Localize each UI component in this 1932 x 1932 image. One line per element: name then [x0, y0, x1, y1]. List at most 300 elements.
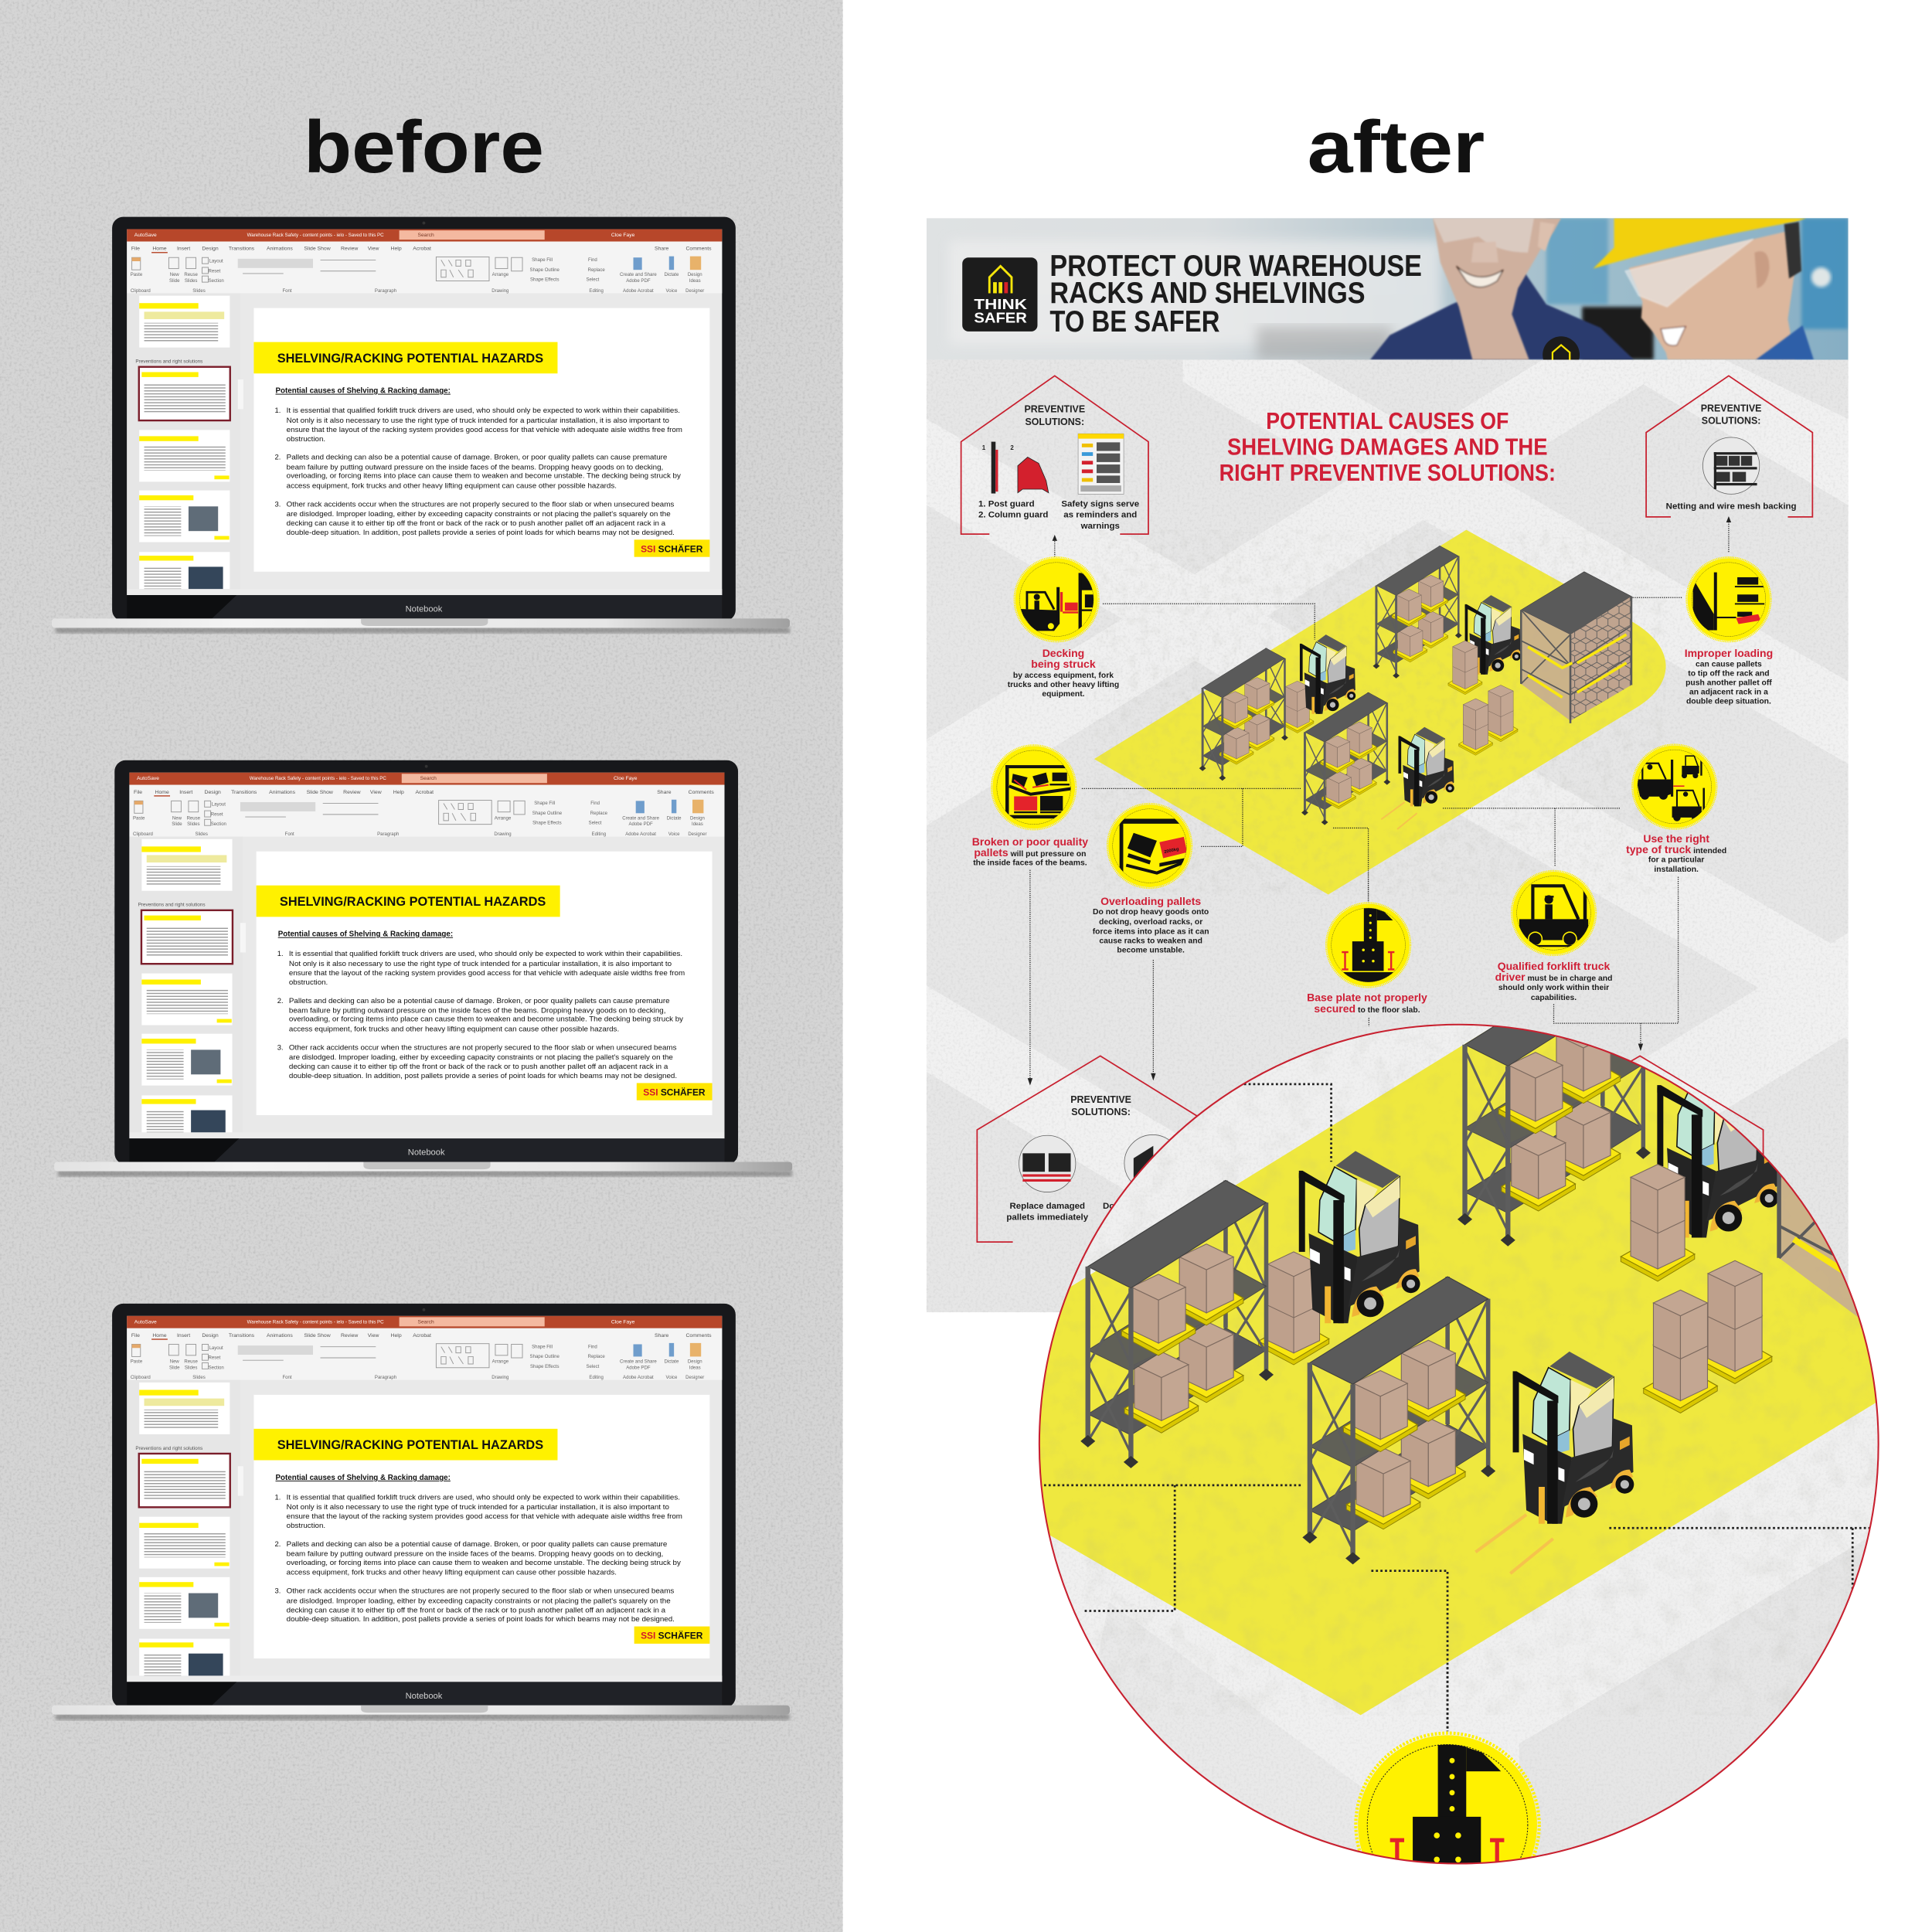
icon: replace damaged pallets	[1019, 1135, 1076, 1192]
laptop 1: slide on shelving hazards: Design	[202, 247, 219, 252]
laptop 1: slide on shelving hazards: access equipment, fork trucks and other heavy lifting equipment can cause other possible hazards.	[287, 481, 617, 489]
laptop 2: slide on shelving hazards: overloading, or forcing items into place can cause them to weaken and become unstable. The decking being struck by	[289, 1015, 683, 1023]
laptop 2: slide on shelving hazards: Insert	[179, 790, 192, 795]
panel: preventive solutions pallets: pallets immediately	[1006, 1213, 1089, 1222]
laptop 3: slide on shelving hazards: Shape Fill	[532, 1345, 553, 1349]
cause: broken pallets	[972, 745, 1088, 867]
laptop 1: slide on shelving hazards: Slides	[185, 279, 197, 284]
laptop 3: slide on shelving hazards: File	[131, 1333, 140, 1338]
heading: before: before	[304, 106, 544, 189]
laptop 3: slide on shelving hazards: ensure that the layout of the racking system provides good access for that vehicle with adequate aisle widths free from	[287, 1512, 682, 1520]
cause: overloading pallets	[1093, 804, 1209, 954]
laptop 1: slide on shelving hazards: SHELVING/RACKING POTENTIAL HAZARDS	[277, 351, 543, 366]
laptop 3: slide on shelving hazards: Pallets and decking can also be a potential cause of damage. Broken, or poor quality pallets can cause premature	[287, 1539, 667, 1548]
laptop 2: slide on shelving hazards: Find	[590, 801, 600, 806]
text: safety signs	[1061, 499, 1139, 531]
panel: preventive solutions netting: SOLUTIONS:	[1702, 415, 1760, 426]
icon: post guard	[982, 442, 1014, 494]
cause: overloading pallets: Do not drop heavy goods onto	[1093, 908, 1209, 917]
laptop 1: slide on shelving hazards: Shape Outline	[530, 268, 560, 273]
laptop 2: slide on shelving hazards: Warehouse Rack Safety - content points - ielo - Saved to this PC	[250, 776, 386, 781]
panel: preventive solutions netting: PREVENTIVE	[1701, 403, 1761, 414]
laptop 2: slide on shelving hazards: Clipboard	[133, 832, 153, 837]
icon: column guard	[1018, 457, 1049, 493]
icon: do not overload	[1124, 1134, 1181, 1192]
laptop 3: slide on shelving hazards: decking can cause it to either tip off the front or back of the rack or to push another pallet off an adjacent rack in a	[287, 1605, 666, 1614]
laptop 2: slide on shelving hazards: Reset	[211, 812, 223, 817]
laptop 3: slide on shelving hazards: obstruction.	[287, 1521, 325, 1529]
laptop 1: slide on shelving hazards: double-deep situation. In addition, post pallets provide a series of point loads for which beams may not be designed.	[287, 528, 675, 536]
laptop 1: slide on shelving hazards: Shape Fill	[532, 258, 553, 263]
laptop 1: slide on shelving hazards: Not only is it also necessary to use the right type of truck intended for a particular installation, it is also important to	[287, 416, 669, 424]
laptop 1: slide on shelving hazards: Drawing	[492, 289, 509, 294]
text: safety signs: as reminders and	[1063, 511, 1137, 520]
laptop 1: slide on shelving hazards: Animations	[267, 247, 293, 252]
laptop 2: slide on shelving hazards: Font	[285, 832, 294, 837]
panel: right preventive house fragment	[1602, 1056, 1764, 1202]
title: protect our warehouse: RACKS AND SHELVINGS	[1049, 277, 1366, 310]
icon: broken pallets on rack	[992, 745, 1076, 830]
laptop 3: slide on shelving hazards: Clipboard	[131, 1376, 151, 1380]
laptop 1: slide on shelving hazards: Adobe PDF	[626, 279, 651, 284]
laptop 2: slide on shelving hazards: Reuse	[187, 816, 201, 821]
laptop 2: slide on shelving hazards: Paste	[133, 816, 145, 821]
panel: preventive solutions pallets: SOLUTIONS:	[1071, 1107, 1131, 1117]
laptop 1: slide on shelving hazards: Section	[209, 279, 224, 284]
laptop 1: slide on shelving hazards: Slide	[169, 279, 180, 284]
laptop 1: slide on shelving hazards: Reset	[209, 269, 221, 274]
panel: preventive solutions pallets: Replace damaged	[1009, 1202, 1085, 1211]
laptop 1: slide on shelving hazards: Designer	[685, 289, 704, 294]
laptop 1: slide on shelving hazards: Paragraph	[375, 289, 396, 294]
laptop 3: slide on shelving hazards: Not only is it also necessary to use the right type of truck intended for a particular installation, it is also important to	[287, 1502, 669, 1511]
cause: base plate: secured to the floor slab.	[1314, 1002, 1420, 1015]
connectors: dotted leader lines to solutions	[1028, 870, 1679, 1086]
laptop 3: slide on shelving hazards: Warehouse Rack Safety - content points - ielo - Saved to this PC	[247, 1319, 384, 1325]
laptop 1: slide on shelving hazards: Create and Share	[620, 273, 657, 277]
laptop 2: slide on shelving hazards: Design	[205, 790, 221, 795]
cause: improper loading	[1685, 557, 1773, 706]
icon: overloaded pallet: 2000kg	[1164, 847, 1180, 855]
laptop 2: slide on shelving hazards: Layout	[212, 803, 226, 808]
laptop 3: slide on shelving hazards: AutoSave	[134, 1319, 157, 1325]
laptop 2: slide on shelving hazards: Cloe Faye	[614, 776, 638, 781]
laptop 3: slide on shelving hazards: Notebook	[406, 1692, 443, 1701]
laptop 1: slide on shelving hazards: Pallets and decking can also be a potential cause of damage. Broken, or poor quality pallets can cause premature	[287, 453, 667, 461]
laptop 2: slide on shelving hazards: Adobe PDF	[628, 822, 653, 827]
laptop 1: slide on shelving hazards: Acrobat	[413, 247, 431, 252]
worker right: face	[1629, 232, 1795, 360]
text: post and column guard: 1. Post guard	[978, 499, 1035, 509]
laptop 3: slide on shelving hazards: Adobe Acrobat	[623, 1376, 654, 1380]
laptop 1: slide on shelving hazards: Warehouse Rack Safety - content points - ielo - Saved to this PC	[247, 233, 384, 238]
laptop 3: slide on shelving hazards: New	[170, 1359, 179, 1364]
text: post and column guard: 2. Column guard	[978, 511, 1048, 520]
laptop 2: slide on shelving hazards: Animations	[269, 790, 296, 795]
cause: qualified driver: Qualified forklift truck	[1498, 960, 1611, 972]
laptop 2: slide on shelving hazards: 2.	[277, 996, 284, 1005]
cause: decking being struck: by access equipment, fork	[1013, 672, 1114, 680]
icon: post guard: 1	[982, 444, 986, 451]
laptop 2: slide on shelving hazards: access equipment, fork trucks and other heavy lifting equipment can cause other possible hazards.	[289, 1025, 619, 1033]
cause: overloading pallets: decking, overload racks, or	[1099, 918, 1202, 927]
laptop 1: slide on shelving hazards: Preventions and right solutions	[135, 359, 202, 365]
laptop 2: slide on shelving hazards: are dislodged. Improper loading, either by exceeding capacity constraints or not placing the pallet's squarely on the	[289, 1053, 673, 1061]
laptop 3: slide on shelving hazards: Transitions	[229, 1333, 255, 1338]
laptop 1: slide on shelving hazards: File	[131, 247, 140, 252]
cause: improper loading: push another pallet off	[1685, 679, 1772, 687]
laptop 1: slide on shelving hazards: Design	[688, 273, 702, 277]
panel: preventive solutions post guard and signs	[961, 376, 1148, 534]
panel: preventive solutions pallets	[977, 1056, 1207, 1242]
laptop 2: slide on shelving hazards: Select	[589, 821, 602, 826]
laptop 3: slide on shelving hazards: 1.	[275, 1492, 281, 1501]
laptop 2: slide on shelving hazards: 3.	[277, 1043, 284, 1051]
laptop 1: slide on shelving hazards: Select	[586, 278, 600, 283]
laptop 1: slide on shelving hazards: AutoSave	[134, 233, 157, 238]
laptop 3: slide on shelving hazards: Slide Show	[304, 1333, 331, 1338]
laptop 2: slide on shelving hazards: Ideas	[692, 822, 703, 827]
laptop 2: slide on shelving hazards: Not only is it also necessary to use the right type of truck intended for a particular installation, it is also important to	[289, 959, 672, 968]
laptop 3: slide on shelving hazards: overloading, or forcing items into place can cause them to weaken and become unstable. The decking being struck by	[287, 1558, 681, 1566]
arrow: improper loading to solutions	[1726, 516, 1731, 552]
laptop 3: slide on shelving hazards: Paste	[131, 1359, 143, 1364]
cause: overloading pallets: cause racks to weaken and	[1099, 937, 1202, 946]
cause: right type of truck	[1626, 744, 1726, 874]
laptop 3: slide on shelving hazards: Section	[209, 1366, 224, 1370]
laptop 2: slide on shelving hazards	[54, 760, 792, 1177]
heading: potential causes: RIGHT PREVENTIVE SOLUTIONS:	[1219, 461, 1556, 486]
cause: base plate	[1307, 991, 1427, 1015]
laptop 2: slide on shelving hazards: Acrobat	[415, 790, 434, 795]
laptop 1: slide on shelving hazards: Review	[341, 247, 358, 252]
laptop 2: slide on shelving hazards: 1.	[277, 949, 284, 957]
laptop 2: slide on shelving hazards: SHELVING/RACKING POTENTIAL HAZARDS	[280, 894, 546, 909]
laptop 3: slide on shelving hazards: Reset	[209, 1356, 221, 1361]
laptop 2: slide on shelving hazards: Adobe Acrobat	[625, 832, 656, 837]
laptop 3: slide on shelving hazards: Share	[655, 1333, 669, 1338]
icon: driver in forklift	[1512, 871, 1596, 955]
laptop 1: slide on shelving hazards: Help	[391, 247, 402, 252]
cause: qualified driver: should only work within their	[1498, 984, 1609, 992]
logo: Think Safer: SAFER	[974, 310, 1027, 326]
cause: overloading pallets: become unstable.	[1117, 946, 1185, 954]
panel: preventive solutions netting: Netting and wire mesh backing	[1666, 502, 1797, 511]
cause: right type of truck: Use the right	[1643, 832, 1709, 845]
panel: preventive solutions netting	[1646, 376, 1812, 517]
laptop 3: slide on shelving hazards: Ideas	[689, 1366, 701, 1370]
laptop 2: slide on shelving hazards: Design	[690, 816, 705, 821]
laptop 3: slide on shelving hazards: Create and Share	[620, 1359, 657, 1364]
laptop 1: slide on shelving hazards: Slides	[192, 289, 206, 294]
panel: poster concrete background	[927, 360, 1849, 1312]
cause: right type of truck: installation.	[1654, 866, 1699, 874]
laptop 2: slide on shelving hazards: Review	[343, 790, 361, 795]
laptop 1: slide on shelving hazards: 1.	[275, 406, 281, 414]
laptop 2: slide on shelving hazards: View	[370, 790, 382, 795]
laptop 2: slide on shelving hazards: New	[172, 816, 182, 821]
icon: post guard: 2	[1010, 444, 1014, 451]
heading: potential causes: SHELVING DAMAGES AND THE	[1227, 434, 1548, 460]
cause: qualified driver	[1495, 871, 1612, 1002]
title: protect our warehouse: TO BE SAFER	[1049, 305, 1219, 338]
laptop 3: slide on shelving hazards: Search	[417, 1319, 434, 1325]
laptop 3: slide on shelving hazards: Designer	[685, 1376, 704, 1380]
title: protect our warehouse	[1049, 250, 1422, 338]
cause: broken pallets: the inside faces of the beams.	[973, 859, 1087, 867]
cause: improper loading: an adjacent rack in a	[1689, 688, 1768, 696]
laptop 3: slide on shelving hazards: 2.	[275, 1539, 281, 1548]
laptop 3: slide on shelving hazards: Voice	[666, 1376, 678, 1380]
panel: before background	[0, 0, 843, 1932]
laptop 2: slide on shelving hazards: AutoSave	[137, 776, 159, 781]
icon: netting	[1702, 437, 1760, 494]
laptop 3: slide on shelving hazards: Paragraph	[375, 1376, 396, 1380]
cause: right type of truck: type of truck intended	[1626, 843, 1726, 855]
laptop 1: slide on shelving hazards: Font	[282, 289, 292, 294]
laptop 1: slide on shelving hazards: Layout	[209, 260, 223, 264]
laptop 3: slide on shelving hazards: Layout	[209, 1346, 223, 1351]
laptop 2: slide on shelving hazards: ensure that the layout of the racking system provides good access for that vehicle with adequate aisle widths free from	[289, 968, 685, 977]
cause: qualified driver: driver must be in charge and	[1495, 971, 1612, 983]
laptop 3: slide on shelving hazards: Reuse	[184, 1359, 199, 1364]
laptop 1: slide on shelving hazards: New	[170, 273, 179, 277]
text: safety signs: Safety signs serve	[1061, 499, 1139, 509]
laptop 2: slide on shelving hazards: Potential causes of Shelving & Racking damage:	[278, 930, 453, 939]
logo: Think Safer	[962, 257, 1037, 332]
laptop 2: slide on shelving hazards: Slide Show	[307, 790, 333, 795]
laptop 1: slide on shelving hazards: Reuse	[184, 273, 199, 277]
worker right: goggles	[1625, 239, 1753, 307]
laptop 2: slide on shelving hazards: beam failure by putting outward pressure on the inside faces of the beams. Dropping heavy goods on to decking,	[289, 1006, 665, 1015]
laptop 1: slide on shelving hazards: Adobe Acrobat	[623, 289, 654, 294]
text: safety signs: warnings	[1080, 522, 1120, 531]
icon: house	[989, 266, 1012, 293]
laptop 2: slide on shelving hazards: Shape Outline	[532, 811, 563, 816]
worker left: face	[1433, 218, 1561, 360]
laptop 3: slide on shelving hazards: Adobe PDF	[626, 1366, 651, 1370]
laptop 1: slide on shelving hazards: ensure that the layout of the racking system provides good access for that vehicle with adequate aisle widths free from	[287, 425, 682, 434]
laptop 2: slide on shelving hazards: Transitions	[231, 790, 257, 795]
laptop 2: slide on shelving hazards: Editing	[592, 832, 606, 837]
laptop 3: slide on shelving hazards: Select	[586, 1365, 600, 1369]
cause: improper loading: Improper loading	[1685, 647, 1773, 659]
laptop 1: slide on shelving hazards: Dictate	[665, 273, 679, 277]
laptop 3: slide on shelving hazards: double-deep situation. In addition, post pallets provide a series of point loads for which beams may not be designed.	[287, 1614, 675, 1623]
laptop 2: slide on shelving hazards: Search	[420, 776, 437, 781]
laptop 3: slide on shelving hazards: are dislodged. Improper loading, either by exceeding capacity constraints or not placing the pallet's squarely on the	[287, 1596, 671, 1604]
worker right: smile and shirt	[1661, 222, 1814, 360]
laptop 2: slide on shelving hazards: Section	[211, 822, 226, 827]
laptop 3: slide on shelving hazards: beam failure by putting outward pressure on the inside faces of the beams. Dropping heavy goods on to decking,	[287, 1549, 663, 1558]
laptop 3: slide on shelving hazards: 3.	[275, 1587, 281, 1595]
badge on shirt	[1543, 336, 1580, 360]
laptop 3: slide on shelving hazards: Shape Outline	[530, 1355, 560, 1359]
magnifying lens: zoomed warehouse floor	[826, 923, 1932, 1917]
cause: decking being struck: Decking	[1043, 647, 1084, 659]
laptop 1: slide on shelving hazards: Cloe Faye	[611, 233, 635, 238]
laptop 1: slide on shelving hazards: Shape Effects	[530, 278, 559, 283]
banner: photo of two smiling workers	[927, 218, 1849, 373]
laptop 3: slide on shelving hazards: Potential causes of Shelving & Racking damage:	[276, 1474, 451, 1482]
cause: improper loading: to tip off the rack and	[1688, 670, 1770, 679]
laptop 1: slide on shelving hazards: 2.	[275, 453, 281, 461]
laptop 2: slide on shelving hazards: Slide	[172, 822, 182, 827]
panel: preventive solutions pallets: Do not overload	[1103, 1202, 1170, 1211]
laptop 1: slide on shelving hazards: Search	[417, 233, 434, 238]
cause: decking being struck: being struck	[1031, 658, 1096, 670]
laptop 2: slide on shelving hazards: File	[134, 790, 142, 795]
laptop 3: slide on shelving hazards: Acrobat	[413, 1333, 431, 1338]
cause: broken pallets: Broken or poor quality	[972, 835, 1088, 848]
laptop 1: slide on shelving hazards: SSI SCHÄFER	[641, 543, 703, 554]
laptop 2: slide on shelving hazards: Slides	[187, 822, 200, 827]
laptop 3: slide on shelving hazards: Other rack accidents occur when the structures are not properly secured to the floor slab or when unsecured beams	[287, 1587, 675, 1595]
laptop 2: slide on shelving hazards: Other rack accidents occur when the structures are not properly secured to the floor slab or when unsecured beams	[289, 1043, 677, 1051]
cause: decking being struck	[1008, 557, 1119, 699]
laptop 1: slide on shelving hazards: beam failure by putting outward pressure on the inside faces of the beams. Dropping heavy goods on to decking,	[287, 462, 663, 471]
panel: preventive solutions post guard and signs: PREVENTIVE	[1024, 403, 1085, 414]
cause: improper loading: double deep situation.	[1686, 697, 1771, 706]
laptop 3: slide on shelving hazards: Insert	[177, 1333, 190, 1338]
cause: broken pallets: pallets will put pressure on	[974, 846, 1086, 859]
laptop 2: slide on shelving hazards: decking can cause it to either tip off the front or back of the rack or to push another pallet off an adjacent rack in a	[289, 1062, 668, 1070]
laptop 1: slide on shelving hazards: Ideas	[689, 279, 701, 284]
laptop 3: slide on shelving hazards: Cloe Faye	[611, 1319, 635, 1325]
laptop 1: slide on shelving hazards: Find	[588, 258, 597, 263]
laptop 2: slide on shelving hazards: SSI SCHÄFER	[643, 1086, 706, 1097]
laptop 2: slide on shelving hazards: Share	[657, 790, 672, 795]
arrow: decking to solutions	[1053, 535, 1057, 557]
laptop 3: slide on shelving hazards: access equipment, fork trucks and other heavy lifting equipment can cause other possible hazards.	[287, 1568, 617, 1577]
title: protect our warehouse: PROTECT OUR WAREHOUSE	[1049, 250, 1422, 283]
cause: qualified driver: capabilities.	[1531, 994, 1577, 1002]
laptop 1: slide on shelving hazards: Replace	[588, 268, 605, 273]
laptop 1: slide on shelving hazards: Notebook	[406, 605, 443, 614]
laptop 1: slide on shelving hazards: Slide Show	[304, 247, 331, 252]
laptop 1: slide on shelving hazards	[52, 217, 790, 634]
laptop 2: slide on shelving hazards: Shape Effects	[532, 821, 562, 826]
laptop 3: slide on shelving hazards: Slides	[185, 1366, 197, 1370]
laptop 2: slide on shelving hazards: Home	[155, 790, 169, 795]
laptop 3: slide on shelving hazards: Home	[152, 1333, 167, 1338]
laptop 3: slide on shelving hazards: SHELVING/RACKING POTENTIAL HAZARDS	[277, 1437, 543, 1452]
laptop 2: slide on shelving hazards: Shape Fill	[534, 801, 555, 806]
panel: preventive solutions post guard and signs: SOLUTIONS:	[1025, 417, 1084, 427]
laptop 1: slide on shelving hazards: Other rack accidents occur when the structures are not properly secured to the floor slab or when unsecured beams	[287, 499, 675, 508]
laptop 1: slide on shelving hazards: Clipboard	[131, 289, 151, 294]
laptop 2: slide on shelving hazards: Preventions and right solutions	[138, 903, 206, 908]
laptop 2: slide on shelving hazards: Dictate	[667, 816, 682, 821]
laptop 1: slide on shelving hazards: Arrange	[492, 273, 509, 277]
laptop 2: slide on shelving hazards: Replace	[590, 811, 608, 816]
laptop 3: slide on shelving hazards: Find	[588, 1345, 597, 1349]
laptop 1: slide on shelving hazards: Insert	[177, 247, 190, 252]
cause: decking being struck: trucks and other heavy lifting	[1008, 681, 1119, 689]
laptop 1: slide on shelving hazards: Paste	[131, 273, 143, 277]
laptop 3: slide on shelving hazards: Dictate	[665, 1359, 679, 1364]
laptop 2: slide on shelving hazards: Create and Share	[622, 816, 660, 821]
laptop 2: slide on shelving hazards: Arrange	[495, 816, 512, 821]
laptop 3: slide on shelving hazards: Font	[282, 1376, 292, 1380]
laptop 2: slide on shelving hazards: Designer	[688, 832, 707, 837]
laptop 3: slide on shelving hazards: Review	[341, 1333, 358, 1338]
worker left: goggles and smile	[1433, 218, 1555, 287]
laptop 2: slide on shelving hazards: Paragraph	[377, 832, 399, 837]
laptop 1: slide on shelving hazards: Editing	[589, 289, 604, 294]
cause: overloading pallets: force items into place as it can	[1093, 928, 1209, 937]
laptop 1: slide on shelving hazards: Share	[655, 247, 669, 252]
laptop 3: slide on shelving hazards: Animations	[267, 1333, 293, 1338]
laptop 1: slide on shelving hazards: Transitions	[229, 247, 255, 252]
laptop 1: slide on shelving hazards: obstruction.	[287, 434, 325, 443]
cause: improper loading: can cause pallets	[1696, 661, 1762, 669]
cause: base plate: Base plate not properly	[1307, 991, 1427, 1003]
cause: overloading pallets: Overloading pallets	[1100, 895, 1201, 907]
laptop 3: slide on shelving hazards: View	[368, 1333, 379, 1338]
laptop 1: slide on shelving hazards: View	[368, 247, 379, 252]
heading: potential causes	[1219, 409, 1556, 486]
icon: improper loading	[1686, 557, 1771, 641]
laptop 3: slide on shelving hazards: Design	[202, 1333, 219, 1338]
laptop 3: slide on shelving hazards: Editing	[589, 1376, 604, 1380]
laptop 2: slide on shelving hazards: Pallets and decking can also be a potential cause of damage. Broken, or poor quality pallets can cause premature	[289, 996, 670, 1005]
laptop 1: slide on shelving hazards: Voice	[666, 289, 678, 294]
laptop 2: slide on shelving hazards: double-deep situation. In addition, post pallets provide a series of point loads for which beams may not be designed.	[289, 1071, 677, 1080]
cause: decking being struck: equipment.	[1042, 690, 1085, 699]
laptop 3: slide on shelving hazards: Replace	[588, 1355, 605, 1359]
icon: safety sign	[1078, 434, 1124, 494]
laptop 3: slide on shelving hazards: SSI SCHÄFER	[641, 1630, 703, 1641]
laptop 1: slide on shelving hazards: decking can cause it to either tip off the front or back of the rack or to push another pallet off an adjacent rack in a	[287, 519, 666, 527]
panel: preventive solutions pallets: PREVENTIVE	[1070, 1094, 1131, 1105]
laptop 2: slide on shelving hazards: Slides	[195, 832, 208, 837]
laptop 1: slide on shelving hazards: are dislodged. Improper loading, either by exceeding capacity constraints or not placing the pallet's squarely on the	[287, 509, 671, 518]
cause: right type of truck: for a particular	[1648, 855, 1704, 864]
laptop 2: slide on shelving hazards: Help	[393, 790, 404, 795]
laptop 1: slide on shelving hazards: Comments	[685, 247, 712, 252]
worker left: blue shirt	[1370, 274, 1634, 360]
heading: after: after	[1308, 106, 1485, 189]
icon: forklift striking decking	[1014, 557, 1099, 641]
laptop 3: slide on shelving hazards: Drawing	[492, 1376, 509, 1380]
laptop 3: slide on shelving hazards: Slide	[169, 1366, 180, 1370]
laptop 3: slide on shelving hazards: Help	[391, 1333, 402, 1338]
laptop 1: slide on shelving hazards: Potential causes of Shelving & Racking damage:	[276, 387, 451, 396]
laptop 1: slide on shelving hazards: Home	[152, 247, 167, 252]
heading: potential causes: POTENTIAL CAUSES OF	[1266, 409, 1509, 434]
laptop 3: slide on shelving hazards: Arrange	[492, 1359, 509, 1364]
laptop 2: slide on shelving hazards: Voice	[668, 832, 680, 837]
laptop 3: slide on shelving hazards: Comments	[685, 1333, 712, 1338]
icon: overloaded pallet	[1107, 804, 1192, 888]
laptop 2: slide on shelving hazards: Drawing	[494, 832, 512, 837]
laptop 2: slide on shelving hazards: Comments	[689, 790, 714, 795]
logo: Think Safer: THINK	[974, 296, 1028, 312]
laptop 2: slide on shelving hazards: Notebook	[408, 1148, 445, 1158]
laptop 2: slide on shelving hazards: It is essential that qualified forklift truck drivers are used, who should only be expected to work within their capabilities.	[289, 949, 682, 957]
worker right: helmet	[1594, 218, 1806, 269]
laptop 3: slide on shelving hazards: It is essential that qualified forklift truck drivers are used, who should only be expected to work within their capabilities.	[287, 1492, 680, 1501]
laptop 2: slide on shelving hazards: obstruction.	[289, 978, 328, 986]
laptop 1: slide on shelving hazards: It is essential that qualified forklift truck drivers are used, who should only be expected to work within their capabilities.	[287, 406, 680, 414]
laptop 3: slide on shelving hazards	[52, 1304, 790, 1720]
laptop 3: slide on shelving hazards: Preventions and right solutions	[135, 1446, 202, 1451]
laptop 1: slide on shelving hazards: 3.	[275, 499, 281, 508]
laptop 3: slide on shelving hazards: Design	[688, 1359, 702, 1364]
laptop 3: slide on shelving hazards: Shape Effects	[530, 1365, 559, 1369]
floor scene: isometric racks and forklifts	[1082, 530, 1682, 988]
